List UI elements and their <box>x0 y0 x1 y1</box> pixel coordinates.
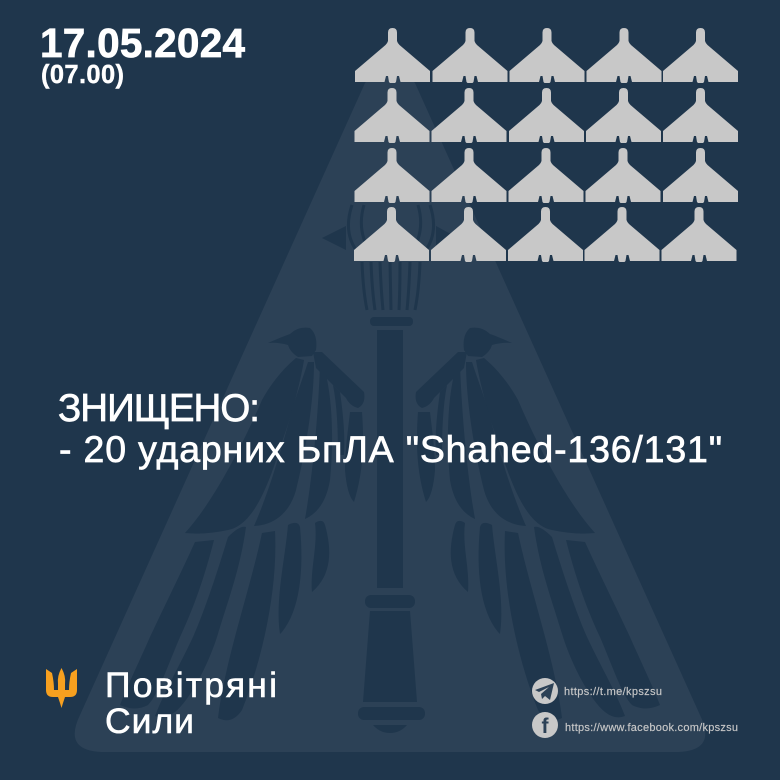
headline: destroyed: ЗНИЩЕНО: <box>58 387 260 430</box>
icon: trident emblem <box>46 668 77 708</box>
drones row 2 <box>354 88 738 143</box>
right wing <box>416 328 660 720</box>
logo wordmark <box>105 665 277 741</box>
column <box>322 226 458 733</box>
emblem triangle <box>75 69 705 752</box>
date: 17.05.2024 <box>40 20 245 66</box>
left wing <box>120 328 364 720</box>
telegram link: https://t.me/kpszsu <box>564 686 662 698</box>
drones row 4 <box>354 207 736 262</box>
wordmark line 2: Сили <box>105 701 194 741</box>
drones row 3 <box>354 148 738 203</box>
facebook link: https://www.facebook.com/kpszsu <box>565 722 738 734</box>
time: (07.00) <box>41 61 124 89</box>
drone grid: 20 destroyed Shahed drones <box>354 28 738 262</box>
drones row 1 <box>355 28 738 83</box>
icon: facebook: f <box>542 715 550 738</box>
wordmark line 1: Повітряні <box>105 665 277 705</box>
icon: facebook <box>532 712 558 738</box>
icon: telegram <box>532 678 558 704</box>
detail line: - 20 ударних БпЛА "Shahed-136/131" <box>59 428 722 470</box>
emblem: triangle with column and wings <box>75 69 705 752</box>
